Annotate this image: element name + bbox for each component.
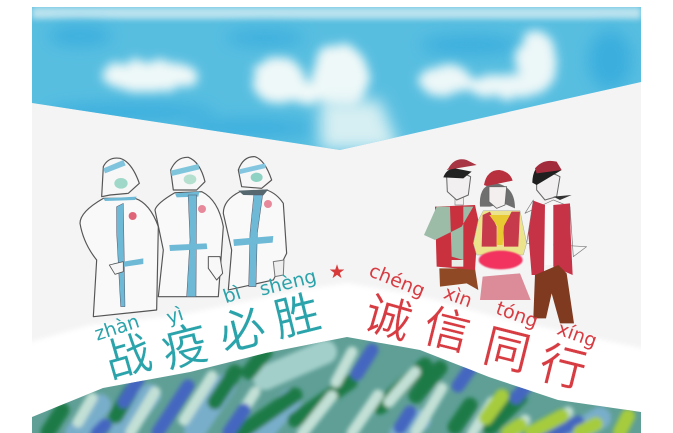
character: 信: 信 xyxy=(418,299,476,361)
pinyin: shèng: shèng xyxy=(257,265,319,301)
pinyin: xìn: xìn xyxy=(441,282,475,312)
cloud: right xyxy=(419,30,556,98)
pinyin: tóng: tóng xyxy=(493,297,541,333)
panel: watercolour sky xyxy=(32,7,641,152)
pinyin: bì: bì xyxy=(220,282,244,308)
heading: teal slogan xyxy=(92,265,326,388)
icon: red star: ★ xyxy=(328,261,346,283)
character: 同: 同 xyxy=(478,319,536,381)
character: 诚: 诚 xyxy=(359,287,417,349)
pinyin: zhàn: zhàn xyxy=(92,310,142,346)
white paper band xyxy=(20,283,650,433)
cloud: centre xyxy=(252,44,368,108)
panel: volunteers xyxy=(424,159,587,323)
pinyin: yì: yì xyxy=(164,303,186,329)
figure: volunteer 1 xyxy=(424,159,478,290)
character: 必: 必 xyxy=(213,299,271,361)
figure: volunteer 2 xyxy=(473,170,531,300)
character: 胜: 胜 xyxy=(268,285,326,347)
pinyin: xíng: xíng xyxy=(554,318,600,352)
character: 疫: 疫 xyxy=(156,316,214,378)
character: 战: 战 xyxy=(99,326,157,388)
figure: medical worker 2 xyxy=(155,157,223,297)
cloud: light streak to valley xyxy=(320,100,400,150)
panel: medical workers xyxy=(80,157,287,317)
figure: volunteer 3 xyxy=(525,161,587,323)
heading: red slogan xyxy=(359,260,600,398)
cloud: left xyxy=(102,60,198,92)
panel: abstract painted ground xyxy=(32,330,641,433)
pinyin: chéng: chéng xyxy=(366,260,428,302)
figure: medical worker 3 xyxy=(223,157,287,290)
character: 行: 行 xyxy=(534,336,592,398)
figure: medical worker 1 xyxy=(80,158,158,317)
